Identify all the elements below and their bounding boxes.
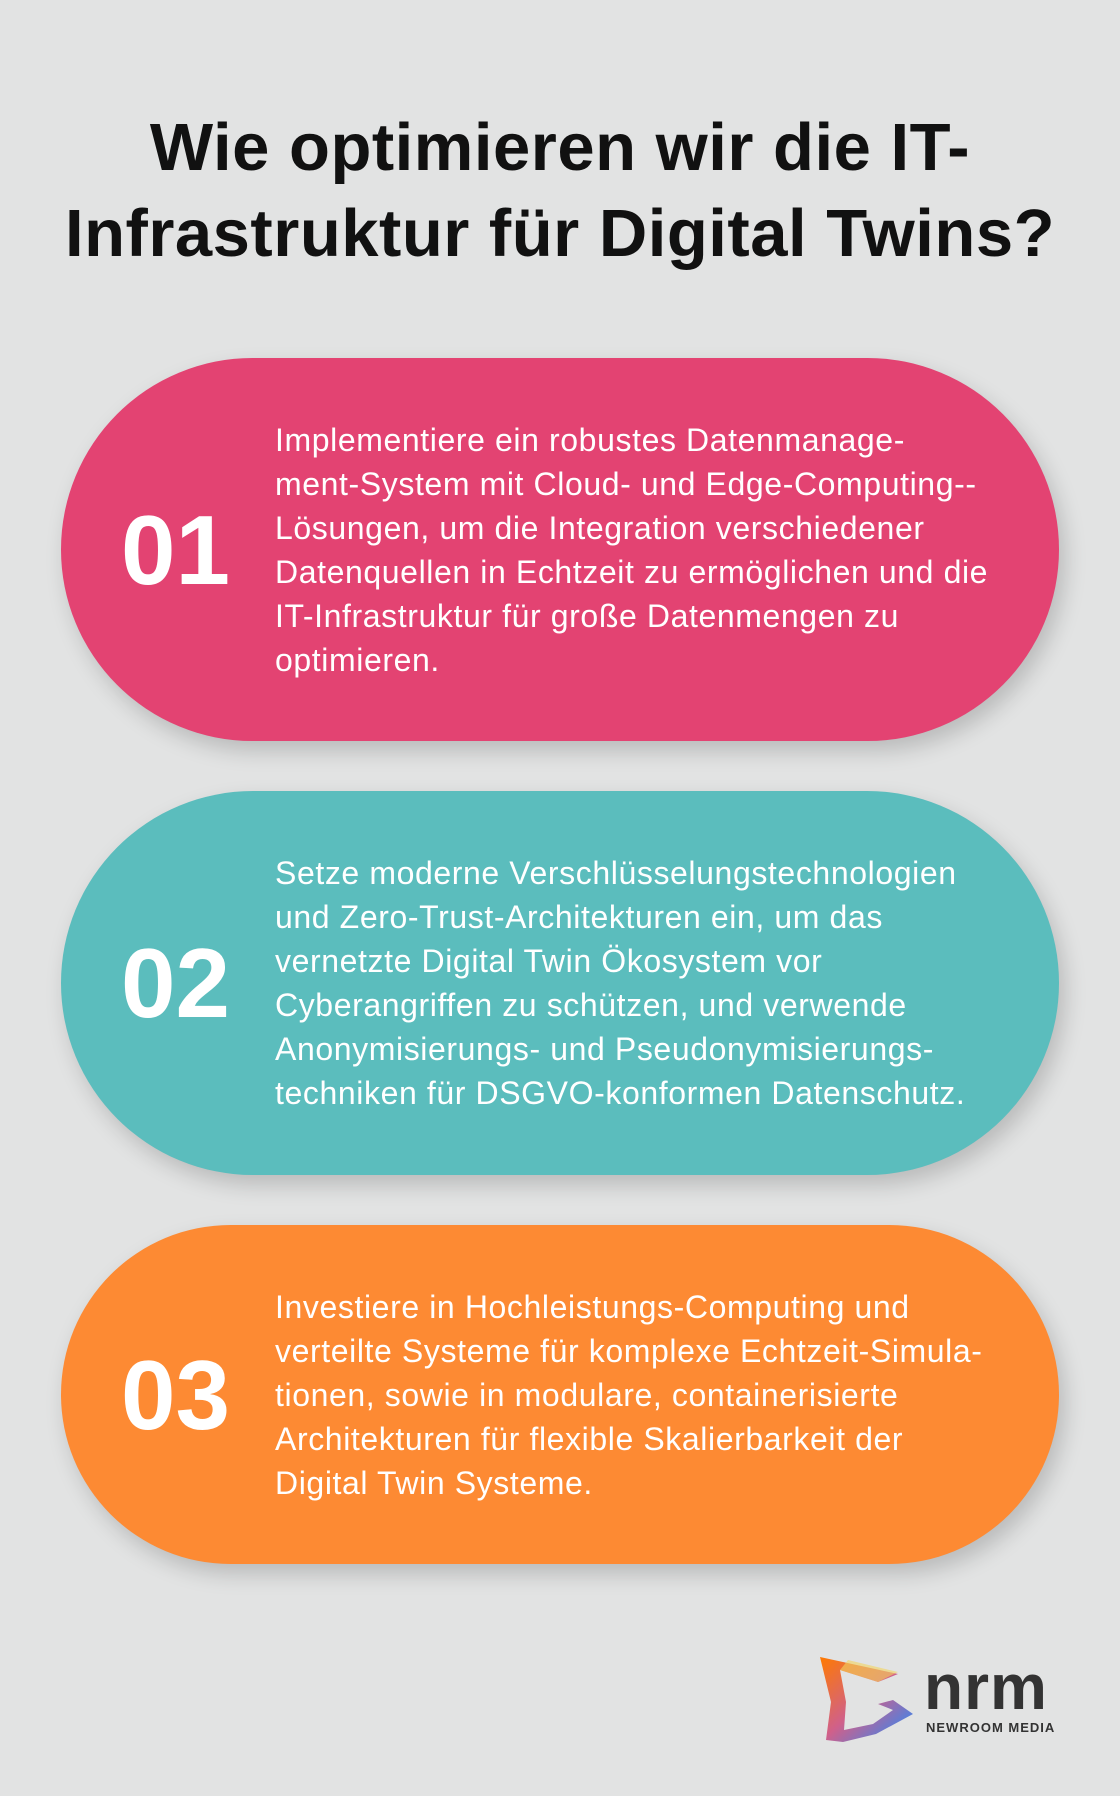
text 01: Datenquellen in Echtzeit zu ermöglichen und die <box>275 554 988 590</box>
panel: step 02 <box>61 791 1059 1175</box>
text 01 <box>275 422 988 678</box>
title: Infrastruktur für Digital Twins? <box>65 196 1055 271</box>
title: Wie optimieren wir die IT- <box>150 110 970 185</box>
text 03 <box>275 1288 983 1500</box>
text 01: ment-System mit Cloud- und Edge-Computing-- <box>275 466 977 502</box>
text 03: Architekturen für flexible Skalierbarkeit der <box>275 1420 903 1456</box>
text 02: Setze moderne Verschlüsselungstechnologien <box>275 855 957 891</box>
number 01: 01 <box>121 494 230 604</box>
text 01: IT-Infrastruktur für große Datenmengen zu <box>275 598 899 634</box>
text 02: und Zero-Trust-Architekturen ein, um das <box>275 899 883 935</box>
text 02: Anonymisierungs- und Pseudonymisierungs- <box>275 1031 934 1067</box>
text 02 <box>275 855 965 1111</box>
icon: logo mark <box>820 1657 913 1742</box>
logo <box>820 1651 1055 1742</box>
text 01: Implementiere ein robustes Datenmanage- <box>275 422 905 458</box>
logo: NEWROOM MEDIA <box>926 1720 1055 1735</box>
text 03: tionen, sowie in modulare, containerisierte <box>275 1376 898 1412</box>
number 02: 02 <box>121 928 230 1038</box>
number 03: 03 <box>121 1340 230 1450</box>
logo text: nrm <box>924 1651 1048 1723</box>
text 03: Digital Twin Systeme. <box>275 1464 593 1500</box>
text 02: Cyberangriffen zu schützen, und verwende <box>275 987 907 1023</box>
text 02: vernetzte Digital Twin Ökosystem vor <box>275 943 822 979</box>
text 02: techniken für DSGVO-konformen Datenschutz. <box>275 1075 965 1111</box>
title <box>65 110 1055 271</box>
text 03: verteilte Systeme für komplexe Echtzeit-Simula- <box>275 1332 983 1368</box>
text 01: Lösungen, um die Integration verschiedener <box>275 510 925 546</box>
panel: step 03 <box>61 1225 1059 1564</box>
text 03: Investiere in Hochleistungs-Computing und <box>275 1288 910 1324</box>
text 01: optimieren. <box>275 642 440 678</box>
panel: step 01 <box>61 358 1059 741</box>
